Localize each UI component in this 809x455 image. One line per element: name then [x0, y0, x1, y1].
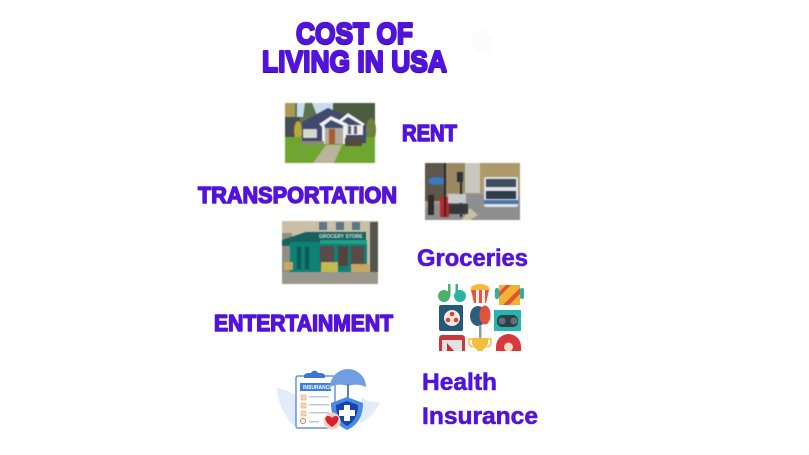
icon: film wheel	[496, 334, 521, 352]
title: COST OF	[296, 18, 413, 50]
icon: striped ticket	[495, 285, 524, 305]
faint watermark	[471, 29, 494, 55]
image: insurance illustration	[277, 369, 380, 430]
image: street with bus	[425, 163, 520, 220]
clipboard: INSURANCE	[303, 385, 333, 391]
icon: cassette	[494, 310, 521, 331]
title	[262, 18, 447, 78]
icon: film case	[439, 305, 463, 331]
label: rent: RENT	[402, 120, 457, 146]
icon: popcorn	[470, 284, 490, 303]
image: house for rent	[285, 103, 376, 163]
heart badge	[324, 412, 340, 430]
image: grocery store: GROCERY STORE	[319, 234, 363, 240]
label: groceries: Groceries	[417, 245, 528, 272]
icon: film reel	[470, 306, 490, 338]
icons: entertainment grid	[438, 284, 524, 352]
shield	[331, 397, 363, 430]
label: health insurance: Health	[422, 369, 497, 396]
icon: video player	[439, 335, 465, 351]
label: transportation: TRANSPORTATION	[198, 182, 397, 208]
label: entertainment: ENTERTAINMENT	[214, 310, 393, 336]
image: grocery store	[282, 221, 378, 284]
icon: music notes	[438, 284, 466, 302]
title: LIVING IN USA	[262, 46, 447, 78]
label: health insurance	[422, 369, 538, 430]
icon: trophy cup	[469, 338, 491, 351]
umbrella	[330, 369, 366, 398]
label: health insurance: Insurance	[422, 403, 538, 430]
leaves	[277, 388, 296, 427]
